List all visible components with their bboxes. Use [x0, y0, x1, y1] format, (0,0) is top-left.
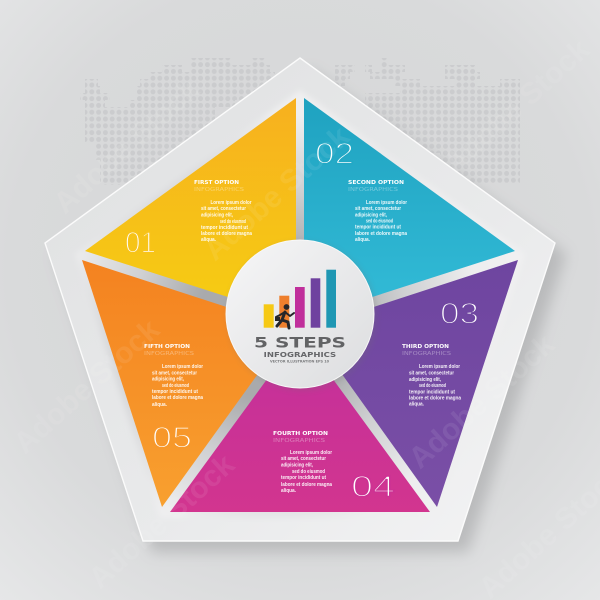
subheading: INFOGRAPHICS — [194, 187, 244, 193]
body text: tempor incididunt ut — [355, 224, 401, 230]
body text: adipisicing elit, — [409, 377, 442, 383]
body text: aliqua. — [281, 488, 297, 494]
body text: sit amet, consectetur — [152, 370, 197, 376]
body text: tempor incididunt ut — [201, 225, 248, 231]
hub subtitle: INFOGRAPHICS — [264, 351, 336, 359]
body text: labore et dolore magna — [409, 396, 461, 402]
body text — [201, 200, 252, 243]
watermark: Adobe Stock — [403, 328, 561, 475]
pentagon frame — [45, 58, 555, 541]
number 01: 01 — [125, 226, 156, 260]
heading: THIRD OPTION — [402, 344, 449, 350]
watermark: Adobe Stock — [198, 120, 356, 267]
body text: aliqua. — [201, 237, 217, 243]
hub disc — [226, 240, 374, 388]
body text: sed do eiusmod — [292, 469, 325, 475]
watermark: Adobe Stock — [8, 313, 166, 460]
heading: FOURTH OPTION — [273, 431, 328, 437]
watermark: Adobe Stock — [48, 73, 206, 220]
body text: sed do eiusmod — [419, 383, 446, 389]
body text: aliqua. — [152, 402, 168, 408]
subheading: INFOGRAPHICS — [273, 438, 325, 444]
body text: aliqua. — [355, 237, 371, 243]
body text: adipisicing elit, — [355, 212, 388, 218]
body text: adipisicing elit, — [152, 376, 185, 382]
central hub — [226, 240, 377, 391]
inner gap shading — [75, 90, 525, 518]
watermark: Adobe Stock — [438, 33, 596, 180]
body text: Lorem ipsum dolor — [210, 200, 252, 206]
body text: sed do eiusmod — [220, 219, 246, 225]
body text: adipisicing elit, — [281, 462, 314, 468]
heading: FIRST OPTION — [194, 180, 239, 186]
body text: Lorem ipsum dolor — [290, 450, 332, 456]
body text — [355, 200, 407, 243]
body text — [152, 364, 203, 408]
body text: sed do eiusmod — [366, 218, 393, 224]
segment 4: fourth option — [170, 334, 430, 512]
segment 3: third option — [309, 260, 518, 507]
dotted world map — [80, 58, 520, 185]
watermark: Adobe Stock — [83, 448, 241, 595]
hub shadow — [227, 241, 377, 391]
body text: Lorem ipsum dolor — [162, 364, 203, 370]
number 05: 05 — [152, 422, 192, 454]
body text: sed do eiusmod — [162, 383, 189, 389]
number 04: 04 — [351, 470, 395, 504]
body text: Lorem ipsum dolor — [419, 364, 460, 370]
body text — [409, 364, 461, 408]
body text: sit amet, consectetur — [409, 370, 454, 376]
bar chart icon — [264, 270, 336, 328]
body text: Lorem ipsum dolor — [366, 200, 407, 206]
segment 2: second option — [304, 98, 515, 319]
body text: tempor incididunt ut — [152, 389, 198, 395]
body text: sit amet, consectetur — [201, 206, 246, 212]
pentagon frame shadow — [55, 70, 566, 552]
heading: SECOND OPTION — [348, 180, 404, 186]
purple panel — [309, 260, 518, 507]
icon: running businessman — [275, 304, 294, 328]
body text: labore et dolore magna — [355, 231, 407, 237]
heading: FIFTH OPTION — [144, 344, 190, 350]
body text: sit amet, consectetur — [281, 456, 326, 462]
subheading: INFOGRAPHICS — [402, 351, 451, 357]
teal panel — [304, 98, 515, 319]
body text: tempor incididunt ut — [281, 475, 326, 481]
body text: labore et dolore magna — [201, 231, 252, 237]
body text: sit amet, consectetur — [355, 206, 401, 212]
number 03: 03 — [440, 298, 479, 330]
orange panel — [82, 260, 291, 507]
body text: tempor incididunt ut — [409, 390, 455, 396]
body text — [281, 450, 332, 494]
body text: adipisicing elit, — [201, 212, 234, 218]
subheading: INFOGRAPHICS — [348, 187, 398, 193]
body text: labore et dolore magna — [281, 482, 332, 488]
segment 1: first option — [85, 98, 296, 319]
body text: labore et dolore magna — [152, 395, 203, 401]
segment 5: fifth option — [82, 260, 291, 507]
subheading: INFOGRAPHICS — [144, 351, 194, 357]
yellow panel — [85, 98, 296, 319]
number 02: 02 — [315, 138, 354, 170]
hub caption: VECTOR ILLUSTRATION EPS 10 — [270, 358, 329, 364]
body text: aliqua. — [409, 402, 425, 408]
magenta panel — [170, 334, 430, 512]
hub title: 5 STEPS — [254, 336, 346, 352]
